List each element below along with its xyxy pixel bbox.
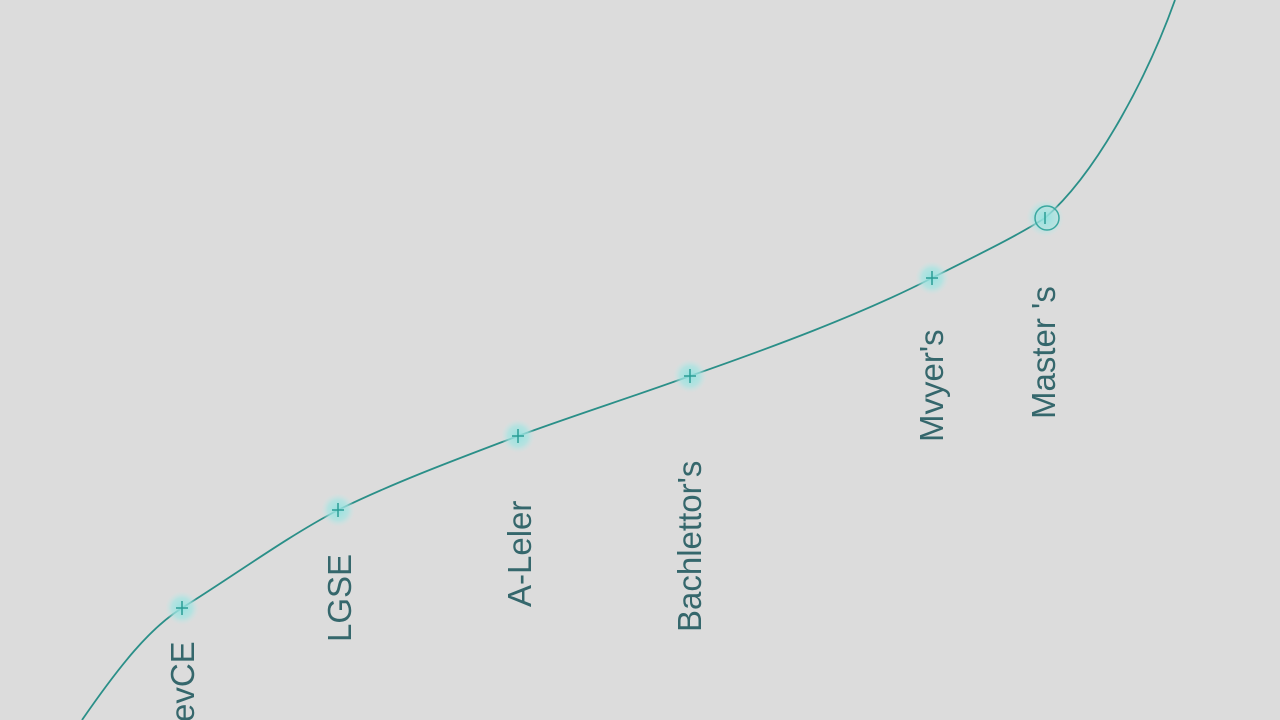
marker: Master's: [1026, 199, 1064, 237]
label: Mvyer's: Mvyer's: [913, 329, 950, 442]
label: A-Leler: A-Leler: [501, 501, 538, 607]
label: Master's: Master 's: [1025, 286, 1062, 419]
label: LGSE: LGSE: [321, 554, 358, 642]
marker: evCE: [165, 591, 199, 625]
marker: Mvyer's: [915, 261, 949, 295]
marker: LGSE: [321, 493, 355, 527]
marker: Bachlettor's: [673, 359, 707, 393]
marker: A-Leler: [501, 419, 535, 453]
label: evCE: evCE: [164, 641, 201, 720]
label: Bachlettor's: Bachlettor's: [671, 461, 708, 632]
